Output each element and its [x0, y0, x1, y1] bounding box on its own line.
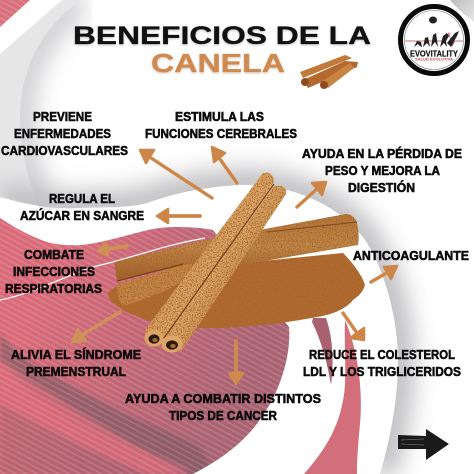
- text: estimula las funciones cerebrales: FUNCIONES CEREBRALES: [145, 126, 297, 141]
- dusky sliver: [312, 318, 333, 385]
- cinnamon powder: [108, 253, 365, 328]
- icon: black next arrow: [398, 429, 449, 460]
- text: alivia el síndrome premenstrual: [11, 347, 141, 379]
- red curved band: [304, 320, 361, 474]
- back sticks: [115, 214, 359, 305]
- text: ayuda en la pérdida de peso: DIGESTIÓN: [348, 180, 415, 195]
- icon: small cinnamon sticks: [300, 55, 358, 89]
- logo: Evovitality: [400, 6, 468, 74]
- arrow: to infecciones: [98, 243, 127, 256]
- arrow: to anticoagulante: [371, 266, 397, 282]
- title: [73, 22, 371, 79]
- pink striped swirl: [0, 210, 300, 474]
- text: previene enfermedades cardiovasculares: ENFERMEDADES: [14, 126, 111, 141]
- arrow: to síndrome: [72, 312, 120, 342]
- text: ayuda en la pérdida de peso: PESO Y MEJORA LA: [325, 163, 440, 178]
- logo: Evovitality: EVOVITALITY: [410, 50, 459, 58]
- text: combate infecciones respiratorias: INFECCIONES: [13, 264, 95, 279]
- text: ayuda en la pérdida de peso: AYUDA EN LA PÉRDIDA DE: [302, 146, 462, 161]
- text: ayuda en la pérdida de peso: [302, 146, 462, 195]
- text: previene enfermedades cardiovasculares: CARDIOVASCULARES: [1, 143, 128, 158]
- text: estimula las funciones cerebrales: ESTIMULA LAS: [175, 109, 264, 124]
- text: combate infecciones respiratorias: [5, 247, 102, 296]
- arrow: to estimula: [212, 147, 237, 183]
- text: estimula las funciones cerebrales: [145, 109, 297, 141]
- title: CANELA: [151, 50, 285, 78]
- title: BENEFICIOS DE LA: [73, 23, 371, 51]
- text: reduce el colesterol: LDL Y LOS TRIGLICERIDOS: [303, 364, 461, 379]
- title: CANELA: [151, 51, 285, 79]
- text: regula el azúcar: REGULA EL: [49, 191, 115, 206]
- text: previene enfermedades cardiovasculares: PREVIENE: [33, 109, 92, 124]
- text: alivia el síndrome premenstrual: PREMENSTRUAL: [26, 364, 126, 379]
- text: regula el azúcar: [20, 191, 144, 223]
- text: regula el azúcar: AZÚCAR EN SANGRE: [20, 208, 144, 223]
- arrow: to colesterol: [343, 313, 364, 340]
- arrow: to digestión: [297, 182, 326, 207]
- text: ayuda a combatir cancer: AYUDA A COMBATIR DISTINTOS: [125, 391, 321, 406]
- text: reduce el colesterol: REDUCE EL COLESTEROL: [309, 347, 455, 362]
- text: combate infecciones respiratorias: RESPIRATORIAS: [5, 281, 102, 296]
- text: combate infecciones respiratorias: COMBATE: [24, 247, 84, 262]
- text: ayuda a combatir cancer: [125, 391, 321, 423]
- text: reduce el colesterol: [303, 347, 461, 379]
- arrow: to cancer: [229, 341, 243, 384]
- main cinnamon illustration: [108, 173, 365, 352]
- text: previene enfermedades cardiovasculares: [1, 109, 128, 158]
- arrow: to previene: [140, 150, 212, 198]
- text: ayuda a combatir cancer: TIPOS DE CANCER: [169, 408, 277, 423]
- logo: Evovitality: SALUD EVOLUTIVA: [415, 58, 453, 62]
- text: alivia el síndrome premenstrual: ALIVIA EL SÍNDROME: [11, 347, 141, 362]
- title: BENEFICIOS DE LA: [73, 22, 371, 50]
- front sticks: [144, 173, 286, 352]
- text: anticoagulante: ANTICOAGULANTE: [353, 248, 469, 263]
- arrow: to azúcar: [157, 209, 200, 223]
